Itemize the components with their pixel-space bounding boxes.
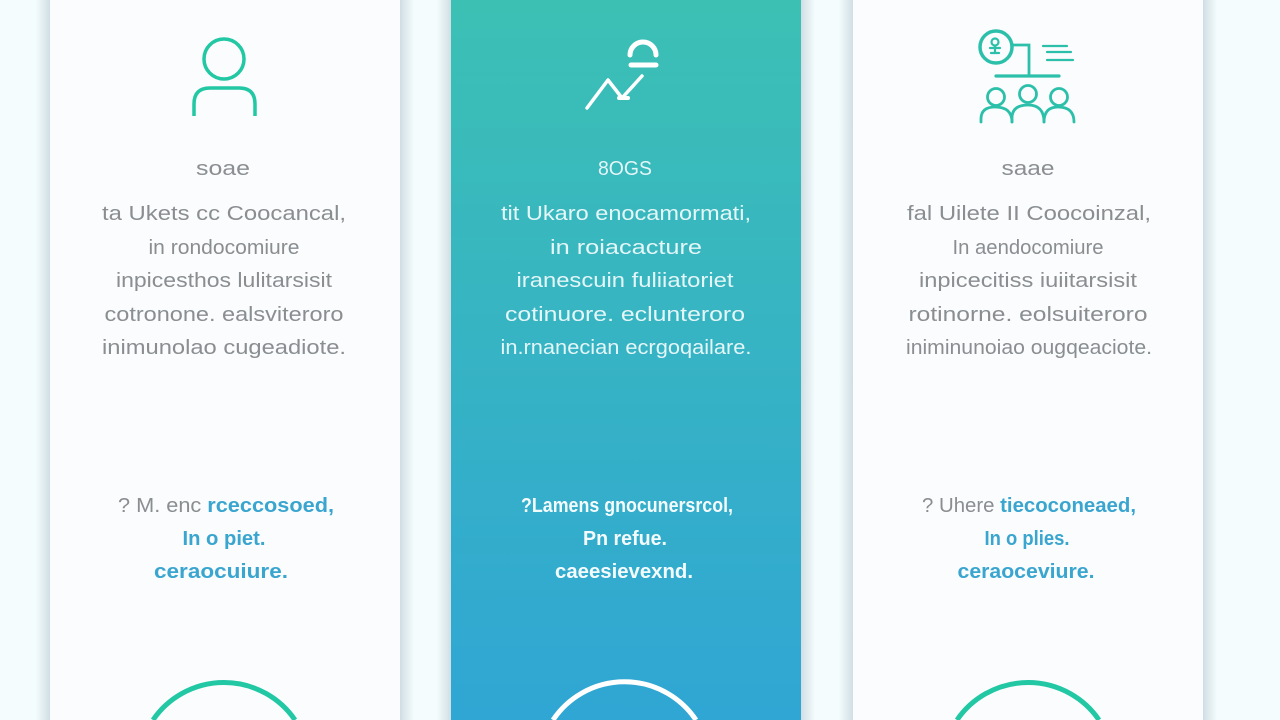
- callout: right card highlight: ceraoceviure.: [958, 561, 1094, 583]
- icon: growth line with dome: [587, 42, 656, 108]
- callout: left card highlight: [118, 495, 334, 583]
- panel: left card: [50, 0, 400, 720]
- icon: person: [194, 39, 255, 116]
- text block: left card description: inpicesthos lulitarsisit: [116, 270, 333, 292]
- callout: left card highlight: In o piet.: [182, 528, 266, 550]
- text block: centre card description: in roiacacture: [550, 237, 702, 259]
- callout: centre card highlight: Pn refue.: [583, 528, 667, 550]
- callout: right card highlight: ? Uhere tiecoconeaed,: [922, 495, 1136, 517]
- callout: centre card highlight: ?Lamens gnocunersrcol,: [521, 495, 733, 517]
- heading: left card: soae: [196, 158, 250, 180]
- callout: right card highlight: [922, 495, 1136, 583]
- text block: centre card description: iranescuin fuliiatoriet: [516, 270, 734, 292]
- text block: right card description: inpicecitiss iuiitarsisit: [919, 270, 1138, 292]
- heading: centre card: 8OGS: [598, 158, 652, 180]
- icon: partial ring: [553, 682, 696, 720]
- text block: left card description: ta Ukets cc Coocancal,: [102, 203, 346, 225]
- text block: centre card description: [500, 203, 752, 359]
- callout: left card highlight: ceraocuiure.: [154, 561, 288, 583]
- text block: right card description: In aendocomiure: [952, 237, 1104, 259]
- text block: left card description: inimunolao cugeadiote.: [102, 337, 346, 359]
- text block: right card description: rotinorne. eolsuiteroro: [908, 304, 1148, 326]
- text block: left card description: [102, 203, 346, 359]
- heading: right card: saae: [1002, 158, 1054, 180]
- text block: centre card description: in.rnanecian ecrgoqailare.: [500, 337, 752, 359]
- panel: right card: [853, 0, 1203, 720]
- callout: right card highlight: In o plies.: [984, 528, 1070, 550]
- text block: right card description: [906, 203, 1152, 359]
- icon: presenter and audience: [980, 31, 1074, 122]
- callout: centre card highlight: [521, 495, 733, 583]
- callout: left card highlight: ? M. enc rceccosoed,: [118, 495, 334, 517]
- text block: centre card description: tit Ukaro enocamormati,: [501, 203, 751, 225]
- panel: centre highlighted card: [451, 0, 801, 720]
- text block: left card description: in rondocomiure: [148, 237, 300, 259]
- text block: right card description: iniminunoiao ougqeaciote.: [906, 337, 1152, 359]
- icon: partial ring: [957, 683, 1099, 720]
- callout: centre card highlight: caeesievexnd.: [555, 561, 693, 583]
- text block: centre card description: cotinuore. eclunteroro: [505, 304, 745, 326]
- icon: partial ring: [153, 683, 295, 720]
- text block: left card description: cotronone. ealsviteroro: [104, 304, 344, 326]
- text block: right card description: fal Uilete II Coocoinzal,: [907, 203, 1151, 225]
